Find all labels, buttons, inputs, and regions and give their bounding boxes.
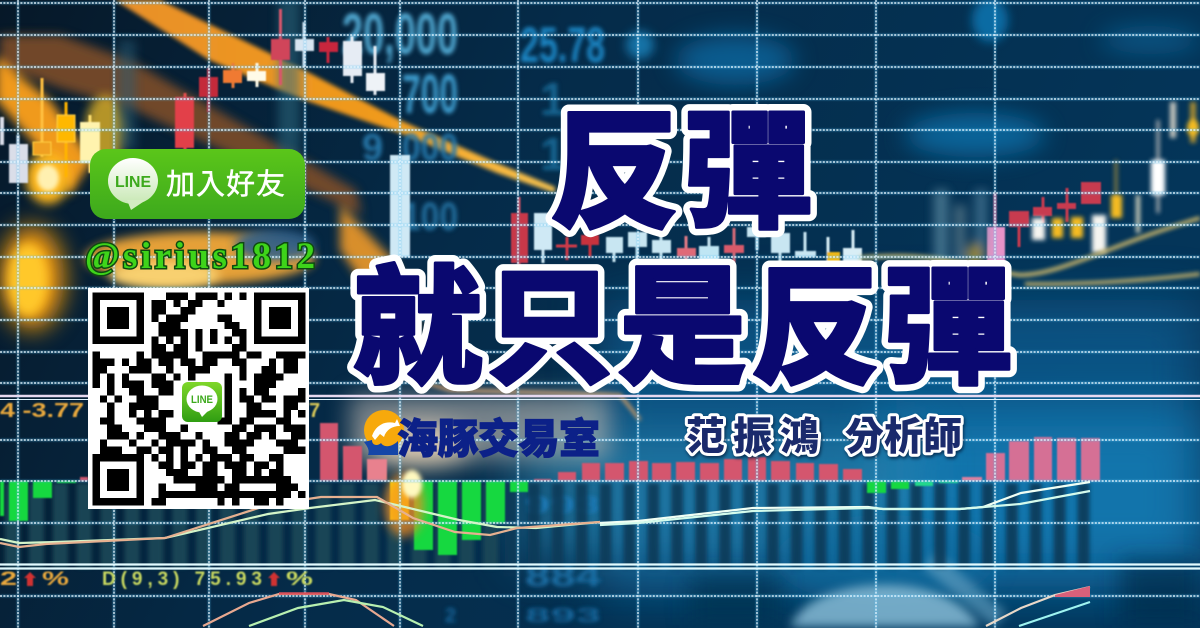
indicator readouts: %	[286, 569, 313, 590]
blurred price digits: 1	[540, 128, 566, 180]
MACD histogram bars	[0, 423, 1100, 555]
icon: LINE speech bubble: LINE	[115, 174, 151, 191]
indicator readouts: 2	[0, 569, 17, 590]
logo: 海豚交易室	[364, 405, 600, 465]
blurred price digits: 000	[402, 127, 458, 169]
indicator readouts: D(9,3) 75.93	[102, 569, 262, 590]
blurred price digits: 2	[445, 605, 456, 627]
indicator readouts: 7	[309, 400, 320, 422]
candlestick chart	[0, 9, 1199, 270]
blurred price digits: 700	[402, 62, 458, 125]
indicator readouts	[0, 400, 320, 590]
blurred price digits: 9	[362, 127, 383, 169]
title: 反彈 就只是反彈	[353, 68, 1012, 411]
title: 反彈 就只是反彈: 反彈	[550, 68, 812, 255]
indicator lines	[0, 482, 1090, 626]
QR code	[88, 288, 309, 509]
blurred price digits	[342, 2, 605, 627]
logo wordmark: 海豚交易室	[397, 405, 600, 465]
icon: LINE speech bubble	[108, 158, 158, 210]
blurred price digits: 20,000	[342, 2, 458, 67]
histogram shadow stripes	[0, 483, 505, 568]
blurred price digits: 893	[525, 605, 601, 627]
title: 反彈 就只是反彈: 就只是反彈	[353, 224, 1012, 411]
blurred price digits: 993	[525, 492, 601, 519]
title: 反彈 就只是反彈: 就只是反彈	[353, 224, 1012, 411]
blurred price digits: 25.78	[520, 17, 605, 73]
LINE add-friend button	[90, 149, 305, 219]
blurred price digits: 884	[525, 560, 601, 593]
blurred price digits: 100	[402, 195, 458, 239]
indicator readouts: %	[42, 569, 69, 590]
button label: 加入好友	[166, 168, 286, 201]
right yellow trend lines	[860, 218, 1200, 284]
icon: sun with dolphin and waves	[364, 410, 404, 455]
analyst name: 范振鴻分析師	[686, 406, 962, 462]
title: 反彈 就只是反彈: 反彈	[550, 68, 812, 255]
glow around yellow bar	[384, 470, 424, 537]
orange trend bands	[0, 35, 420, 330]
blurred price digits: 1	[540, 73, 566, 125]
LINE ID: @sirius1812	[85, 236, 315, 277]
indicator readouts: 4 -3.77	[0, 400, 84, 422]
icon: LINE app badge: LINE	[191, 394, 213, 406]
icon: LINE app badge	[182, 382, 222, 422]
